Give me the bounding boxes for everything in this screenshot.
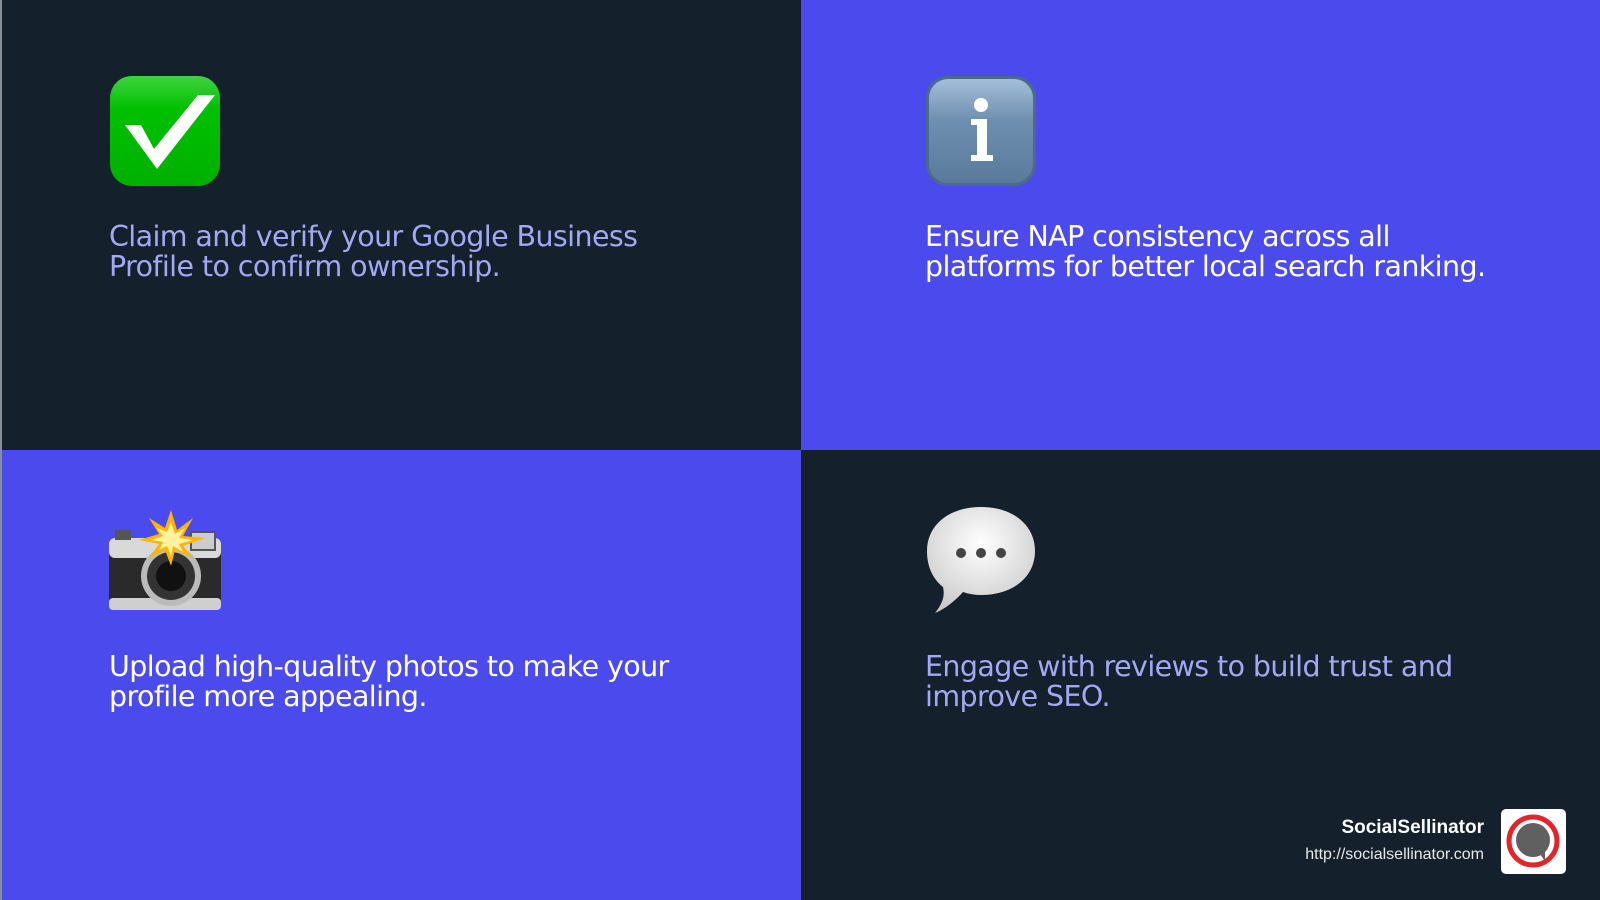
panel: upload photos bbox=[2, 450, 801, 900]
icon: info bbox=[926, 76, 1036, 186]
left border line bbox=[0, 0, 2, 900]
text: claim: Profile to confirm ownership. bbox=[109, 250, 500, 283]
icon: speech bubble bbox=[927, 507, 1035, 613]
brand: SocialSellinator: http://socialsellinator.com bbox=[1305, 846, 1484, 863]
text: NAP: platforms for better local search ranking. bbox=[925, 250, 1485, 283]
text: NAP: Ensure NAP consistency across all bbox=[925, 220, 1390, 253]
text: engage: improve SEO. bbox=[925, 680, 1110, 713]
text: engage bbox=[925, 650, 1453, 713]
panel: NAP consistency bbox=[801, 0, 1600, 450]
brand: SocialSellinator bbox=[1305, 817, 1484, 863]
panel: claim and verify bbox=[2, 0, 801, 450]
text: NAP bbox=[925, 220, 1485, 283]
text: upload: profile more appealing. bbox=[109, 680, 427, 713]
text: engage: Engage with reviews to build trust and bbox=[925, 650, 1453, 683]
panel: engage reviews bbox=[801, 450, 1600, 900]
text: upload: Upload high-quality photos to make your bbox=[109, 650, 669, 683]
text: claim: Claim and verify your Google Business bbox=[109, 220, 637, 253]
icon: camera with flash bbox=[109, 510, 221, 610]
text: upload bbox=[109, 650, 670, 713]
brand: SocialSellinator: SocialSellinator bbox=[1341, 817, 1484, 838]
icon: green check bbox=[110, 76, 220, 186]
logo bbox=[1501, 809, 1566, 874]
text: claim bbox=[109, 220, 637, 283]
